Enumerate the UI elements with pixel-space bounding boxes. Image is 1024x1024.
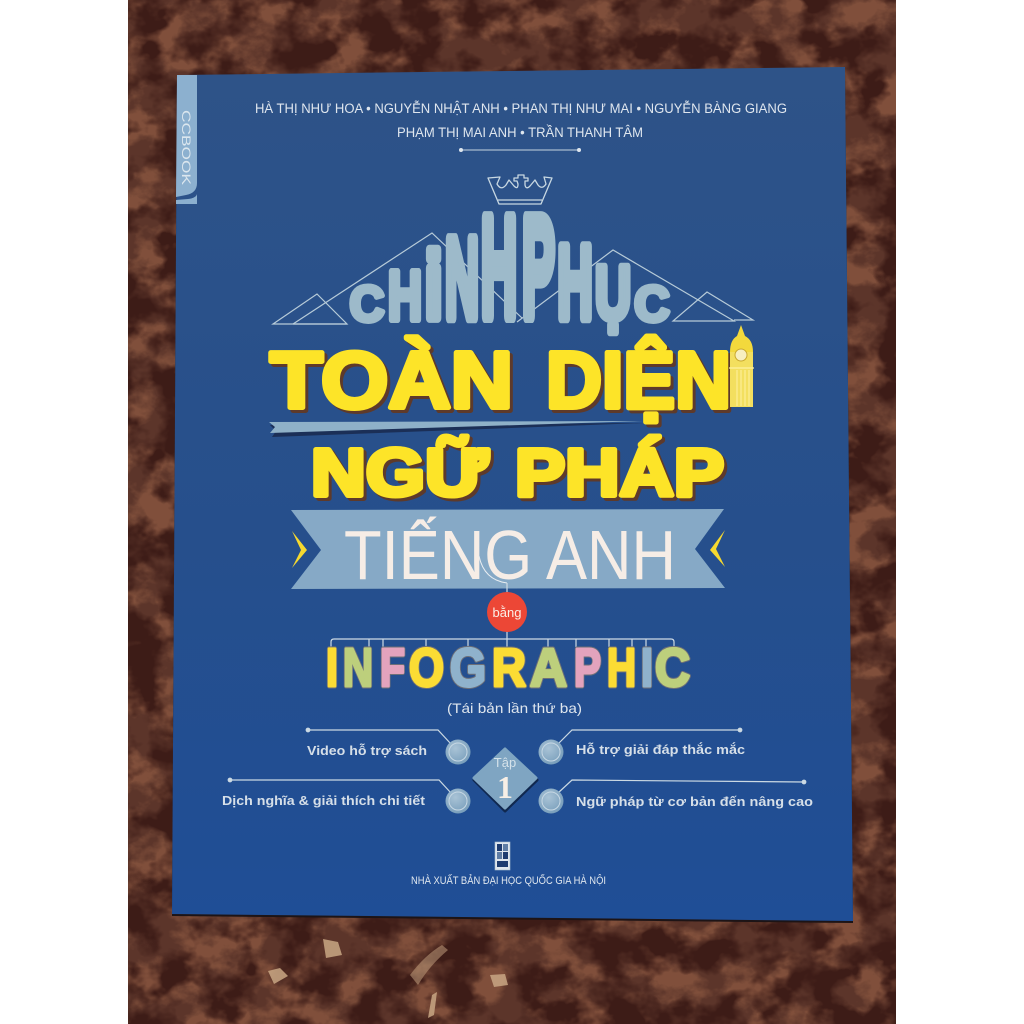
heading: Infographic: A — [530, 638, 567, 698]
book cover — [172, 67, 853, 923]
heading: Chinh Phục — [350, 188, 670, 347]
feature: questions support — [538, 740, 745, 764]
heading: Infographic: F — [380, 638, 405, 698]
publisher logo — [495, 842, 510, 870]
heading: Infographic: G — [450, 638, 486, 698]
feature: translation: Dịch nghĩa & giải thích chi tiết — [222, 793, 426, 808]
heading: Chinh Phục: C — [350, 277, 384, 332]
feature: translation — [222, 788, 470, 814]
heading: Infographic: H — [607, 638, 636, 698]
feature: grammar levels — [538, 788, 813, 814]
publisher spine tab — [176, 75, 197, 204]
heading: Infographic: H — [607, 638, 636, 698]
heading: Toàn Diện — [270, 336, 734, 428]
heading: Ngữ Pháp: NGỮ — [314, 438, 491, 514]
heading: Infographic: G — [450, 638, 486, 698]
icon: clock tower — [729, 325, 754, 407]
heading: Chinh Phục: H — [557, 224, 593, 341]
heading: Infographic: A — [530, 638, 567, 698]
heading: Infographic: O — [409, 638, 444, 698]
heading: Infographic — [326, 638, 690, 698]
heading: Ngữ Pháp: PHÁP — [515, 436, 724, 510]
heading: Infographic: N — [343, 638, 373, 698]
heading: Toàn Diện: DIỆN — [546, 336, 731, 424]
heading: Chinh Phục: Ụ — [595, 251, 631, 336]
heading: Infographic: F — [380, 638, 405, 698]
heading: Infographic: C — [655, 638, 690, 698]
icon: crown — [488, 175, 552, 204]
feature: grammar levels: Ngữ pháp từ cơ bản đến nâng cao — [576, 794, 813, 809]
authors — [255, 101, 787, 152]
heading: Infographic: I — [326, 638, 338, 698]
heading: Ngữ Pháp — [311, 436, 727, 514]
heading: Infographic: I — [641, 638, 653, 698]
heading: Infographic: N — [343, 638, 373, 698]
heading: Infographic: I — [641, 638, 653, 698]
heading: Ngữ Pháp: PHÁP — [518, 438, 727, 514]
heading: Chinh Phục: N — [445, 215, 479, 342]
feature: questions support: Hỗ trợ giải đáp thắc mắc — [576, 742, 745, 757]
ribbon underline — [269, 421, 644, 437]
feature connector lines — [228, 728, 806, 793]
heading: Chinh Phục: H — [481, 188, 517, 347]
heading: Infographic: R — [492, 638, 526, 698]
marble table background — [128, 0, 896, 1024]
edition note: (Tái bản lần thứ ba) — [447, 700, 582, 716]
authors: PHẠM THỊ MAI ANH • TRẦN THANH TÂM — [397, 125, 643, 140]
heading: Infographic: C — [655, 638, 690, 698]
heading: Infographic: P — [574, 638, 601, 698]
heading: Infographic: P — [574, 638, 601, 698]
heading: Chinh Phục: i — [425, 233, 443, 339]
banner: Tiếng Anh: TIẾNG ANH — [344, 516, 676, 594]
authors: HÀ THỊ NHƯ HOA • NGUYỄN NHẬT ANH • PHAN THỊ NHƯ MAI • NGUYỄN BÀNG GIANG — [255, 101, 787, 116]
heading: Infographic: O — [409, 638, 444, 698]
heading: Infographic: I — [326, 638, 338, 698]
red circle: bằng — [487, 583, 527, 650]
connector tree — [331, 639, 674, 648]
publisher spine tab: CCBOOK — [179, 110, 193, 185]
mountain outlines — [273, 233, 753, 324]
volume diamond: Tập — [494, 755, 516, 770]
heading: Infographic: R — [492, 638, 526, 698]
heading: Chinh Phục: C — [634, 277, 670, 332]
heading: Chinh Phục: P — [522, 188, 555, 347]
publisher name: NHÀ XUẤT BẢN ĐẠI HỌC QUỐC GIA HÀ NỘI — [411, 873, 606, 887]
heading: Toàn Diện: TOÀN — [273, 338, 516, 428]
red circle: bằng: bằng — [493, 605, 521, 620]
volume diamond: 1 — [497, 769, 513, 805]
heading: Ngữ Pháp: NGỮ — [311, 436, 488, 510]
volume diamond — [474, 749, 537, 811]
heading: Toàn Diện: DIỆN — [549, 338, 734, 428]
heading: Chinh Phục: H — [388, 256, 422, 335]
feature: video support: Video hỗ trợ sách — [307, 743, 427, 758]
heading: Toàn Diện: TOÀN — [270, 336, 513, 424]
feature: video support — [307, 740, 470, 764]
